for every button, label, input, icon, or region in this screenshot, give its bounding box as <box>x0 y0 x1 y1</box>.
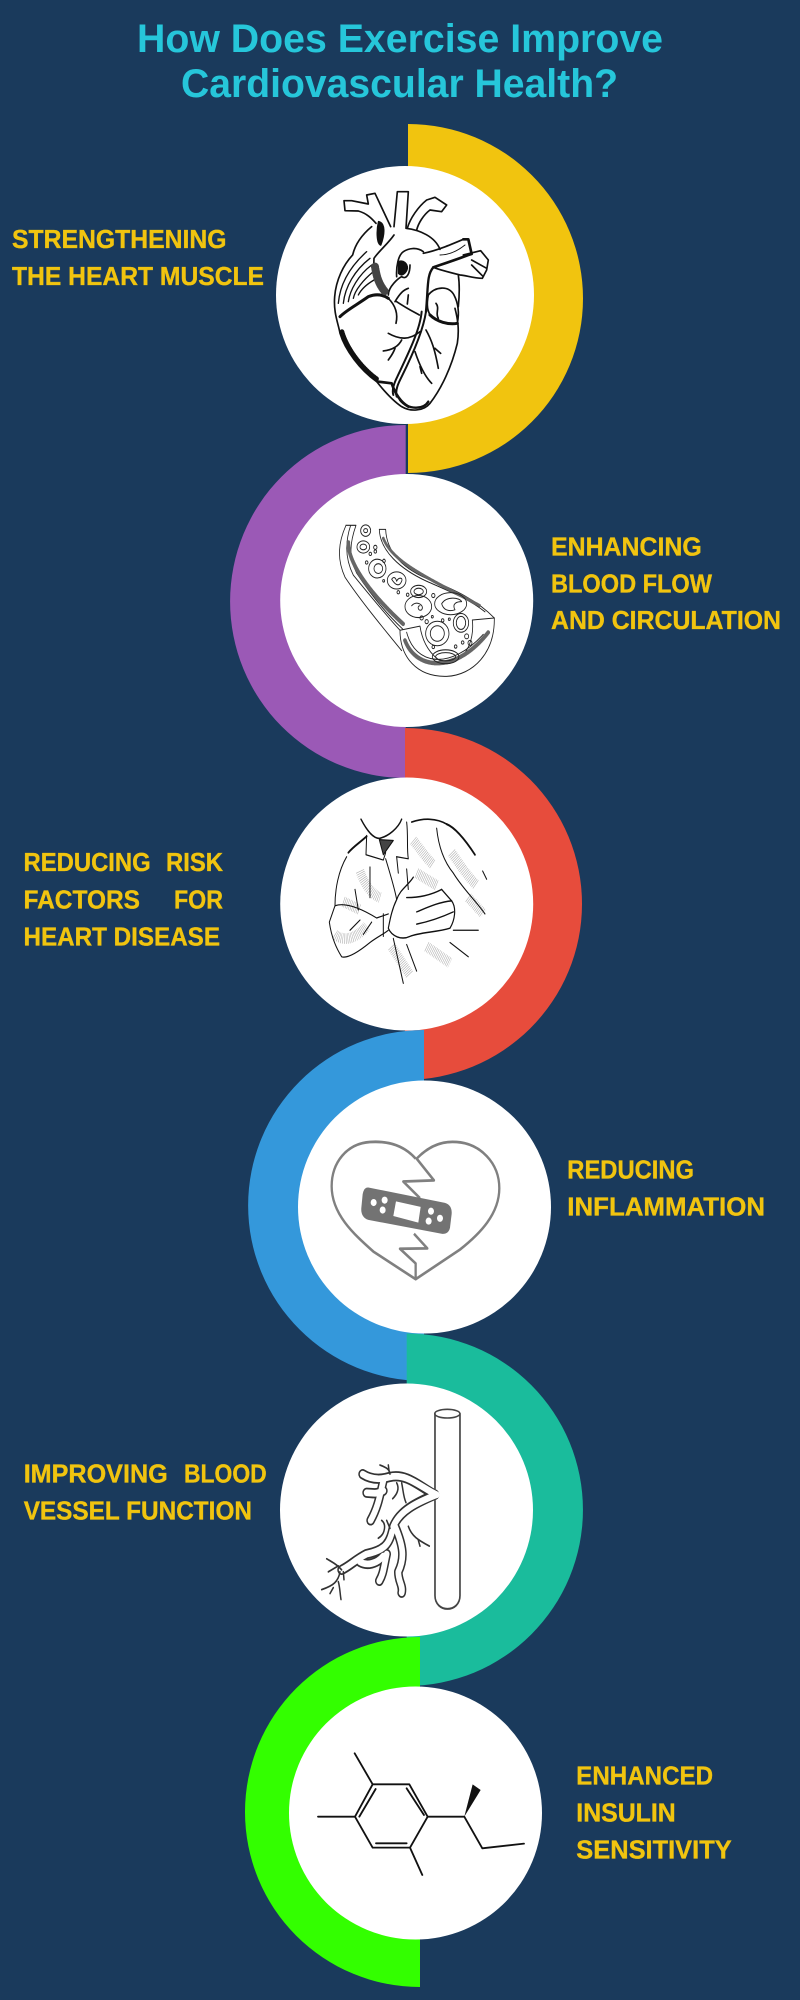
yellow half ring <box>408 124 583 473</box>
panel: improving blood vessel function <box>24 1334 583 1686</box>
purple half ring <box>230 425 406 778</box>
label: enhancing blood flow and circulation: BLOOD FLOW <box>551 569 712 599</box>
red half ring <box>405 728 582 1080</box>
panel: strengthening the heart muscle <box>12 124 583 473</box>
label: reducing inflammation: INFLAMMATION <box>567 1192 765 1222</box>
title: Cardiovascular Health? <box>181 62 618 106</box>
label: reducing risk factors for heart disease: HEART DISEASE <box>24 922 220 952</box>
label: enhanced insulin sensitivity: ENHANCED <box>576 1760 713 1790</box>
label: reducing risk factors for heart disease <box>24 847 223 952</box>
label: improving blood vessel function <box>24 1459 267 1525</box>
label: reducing inflammation: REDUCING <box>567 1154 694 1184</box>
icon: branching artery <box>322 1409 460 1609</box>
label: reducing inflammation <box>567 1154 765 1222</box>
label: strengthening the heart muscle: THE HEART MUSCLE <box>12 261 264 291</box>
title: How Does Exercise Improve <box>137 17 663 61</box>
label: improving blood vessel function: IMPROVING <box>24 1459 168 1489</box>
label: reducing risk factors for heart disease: FOR <box>174 885 223 915</box>
icon: blood vessel cross-section <box>339 525 494 676</box>
green half ring <box>245 1637 420 1987</box>
title <box>137 17 663 106</box>
label: enhanced insulin sensitivity <box>576 1760 732 1865</box>
label: reducing risk factors for heart disease: RISK <box>166 847 223 877</box>
label: reducing risk factors for heart disease: REDUCING <box>24 847 151 877</box>
white circle 3 <box>280 778 533 1030</box>
label: improving blood vessel function: BLOOD <box>184 1459 267 1489</box>
label: improving blood vessel function: VESSEL FUNCTION <box>24 1495 252 1525</box>
white circle 4 <box>298 1080 551 1334</box>
teal half ring <box>407 1334 583 1686</box>
panel: enhanced insulin sensitivity <box>245 1637 732 1987</box>
label: enhancing blood flow and circulation: ENHANCING <box>551 532 702 562</box>
label: strengthening the heart muscle <box>12 224 264 291</box>
label: enhanced insulin sensitivity: INSULIN <box>576 1798 676 1828</box>
blue half ring <box>248 1030 424 1381</box>
label: strengthening the heart muscle: STRENGTHENING <box>12 224 226 254</box>
icon: molecule structure <box>318 1753 524 1875</box>
white circle 5 <box>280 1384 533 1636</box>
icon: broken heart with bandage <box>332 1142 499 1279</box>
panel: reducing inflammation <box>248 1030 765 1381</box>
white circle 6 <box>289 1686 542 1940</box>
white circle 1 <box>276 166 534 424</box>
white circle 2 <box>280 474 533 727</box>
label: enhanced insulin sensitivity: SENSITIVITY <box>576 1835 732 1865</box>
label: reducing risk factors for heart disease: FACTORS <box>24 885 140 915</box>
icon: person clutching chest <box>329 819 487 983</box>
panel: reducing risk factors for heart disease <box>24 728 582 1080</box>
label: enhancing blood flow and circulation: AND CIRCULATION <box>551 605 781 635</box>
panel: enhancing blood flow and circulation <box>230 425 781 778</box>
icon: anatomical heart <box>334 192 488 410</box>
label: enhancing blood flow and circulation <box>551 532 781 635</box>
